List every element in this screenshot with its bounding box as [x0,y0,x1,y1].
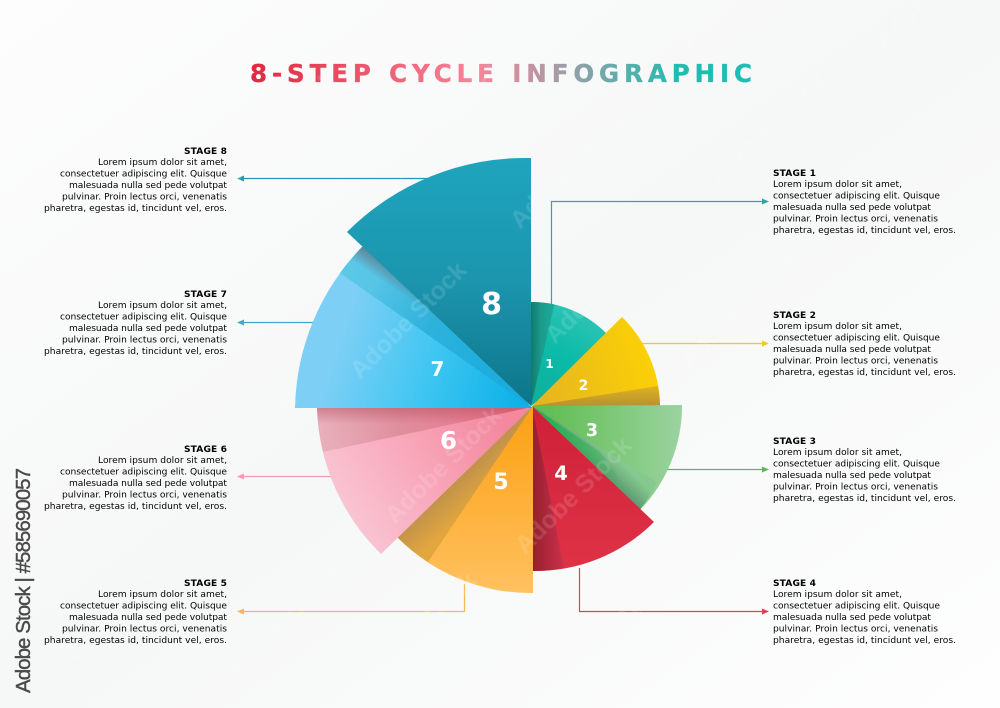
segment 6 [317,400,532,554]
watermark pattern: Adobe Stock [539,221,667,349]
text: stage 4: Lorem ipsum dolor sit amet, [773,590,902,600]
watermark pattern: Adobe Stock [379,401,507,529]
text: stage 6: STAGE 6 [184,445,227,455]
text: stage 4: STAGE 4 [773,579,816,589]
text: stage 2: STAGE 2 [773,311,816,321]
text: stage 5: pulvinar. Proin lectus orci, venenatis [62,624,227,634]
text: stage 5: malesuada nulla sed pede volutpat [69,613,227,623]
watermark pattern: Adobe Stock [384,56,512,184]
numbers: 3 [586,421,598,441]
text: stage 3: pharetra, egestas id, tincidunt vel, eros. [773,494,956,504]
text: stage 7 [44,290,227,357]
numbers: 1 [545,357,554,371]
text: stage 4: malesuada nulla sed pede volutpat [773,613,931,623]
text: stage 6: malesuada nulla sed pede volutpat [69,479,227,489]
connector: stage 1 [552,198,769,304]
segment 7 [295,240,532,408]
segment 1 [531,302,612,406]
text: stage 1 [773,169,956,236]
segment 5 [397,406,533,593]
watermark pattern: Adobe Stock [219,556,347,684]
text: stage 3: malesuada nulla sed pede volutpat [773,471,931,481]
connector: stage 5 [237,584,464,614]
text: stage 2: consectetuer adipiscing elit. Quisque [773,334,940,344]
text: stage 1: pulvinar. Proin lectus orci, venenatis [773,214,938,224]
watermark pattern: Adobe Stock [714,571,842,699]
segment 2 [532,317,660,410]
text: stage 8: malesuada nulla sed pede volutpat [69,181,227,191]
text: stage 3: pulvinar. Proin lectus orci, venenatis [773,482,938,492]
numbers: 6 [440,426,457,455]
text: stage 4: pharetra, egestas id, tincidunt vel, eros. [773,636,956,646]
watermark pattern: Adobe Stock [549,566,677,694]
watermark pattern: Adobe Stock [344,256,472,384]
text: stage 2: malesuada nulla sed pede volutpat [773,345,931,355]
text: stage 5: Lorem ipsum dolor sit amet, [98,590,227,600]
text: stage 2: pharetra, egestas id, tincidunt vel, eros. [773,368,956,378]
connector: stage 4 [580,568,769,614]
text: stage 4: consectetuer adipiscing elit. Quisque [773,602,940,612]
text: stage 6: pharetra, egestas id, tincidunt vel, eros. [44,502,227,512]
text: stage 3: STAGE 3 [773,437,816,447]
watermark pattern: Adobe Stock [714,406,842,534]
text: stage 4 [773,579,956,646]
text: stage 7: pulvinar. Proin lectus orci, venenatis [62,336,227,346]
text: stage 5: consectetuer adipiscing elit. Quisque [60,602,227,612]
connector: stage 6 [237,474,332,480]
text: stage 5 [44,579,227,646]
watermark pattern: Adobe Stock [174,386,302,514]
watermark pattern: Adobe Stock [704,66,832,194]
text: stage 1: consectetuer adipiscing elit. Quisque [773,192,940,202]
watermark pattern: Adobe Stock [864,216,992,344]
numbers: 8 [481,287,502,322]
text: stage 2: pulvinar. Proin lectus orci, venenatis [773,356,938,366]
text: stage 8: pulvinar. Proin lectus orci, venenatis [62,192,227,202]
text: stage 7: malesuada nulla sed pede volutpat [69,324,227,334]
text: stage 2: Lorem ipsum dolor sit amet, [773,322,902,332]
text: stage 5: pharetra, egestas id, tincidunt vel, eros. [44,636,227,646]
watermark pattern: Adobe Stock [874,366,1000,494]
watermark pattern: Adobe Stock [864,66,992,194]
watermark pattern: Adobe Stock [14,216,142,344]
text: stage 8: STAGE 8 [184,147,227,157]
watermark pattern: Adobe Stock [194,216,322,344]
watermark pattern: Adobe Stock [509,431,637,559]
text: stage 1: malesuada nulla sed pede volutpat [773,203,931,213]
segment 3 [532,405,682,512]
watermark pattern: Adobe Stock [674,246,802,374]
stock id side text: Adobe Stock | #585690057 [12,468,35,693]
text: stage 7: STAGE 7 [184,290,227,300]
connector: stage 2 [642,340,769,346]
text: stage 7: consectetuer adipiscing elit. Quisque [60,312,227,322]
numbers: 4 [554,462,568,485]
numbers [431,287,598,495]
watermark pattern: Adobe Stock [44,66,172,194]
numbers: 5 [493,470,509,495]
text: stage 1: Lorem ipsum dolor sit amet, [773,180,902,190]
text: stage 7: pharetra, egestas id, tincidunt vel, eros. [44,347,227,357]
text: stage 2 [773,311,956,378]
connector: stage 7 [237,320,314,326]
text: stage 7: Lorem ipsum dolor sit amet, [98,301,227,311]
watermark pattern: Adobe Stock [54,546,182,674]
text: stage 6: pulvinar. Proin lectus orci, venenatis [62,490,227,500]
watermark pattern: Adobe Stock [34,366,162,494]
text: stage 8: consectetuer adipiscing elit. Quisque [60,170,227,180]
text: stage 8: pharetra, egestas id, tincidunt vel, eros. [44,204,227,214]
text: stage 1: pharetra, egestas id, tincidunt vel, eros. [773,226,956,236]
watermark pattern: Adobe Stock [354,566,482,694]
text: stage 5: STAGE 5 [184,579,227,589]
segment 8 [347,158,531,406]
text: stage 3: consectetuer adipiscing elit. Quisque [773,460,940,470]
text: stage 6: Lorem ipsum dolor sit amet, [98,456,227,466]
watermark pattern: Adobe Stock [504,106,632,234]
text: stage 3 [773,437,956,504]
chart: spiral pie [295,158,682,593]
text: stage 6: consectetuer adipiscing elit. Quisque [60,468,227,478]
text: stage 3: Lorem ipsum dolor sit amet, [773,448,902,458]
text: stage 1: STAGE 1 [773,169,816,179]
connector: stage 8 [237,176,428,182]
text: stage 4: pulvinar. Proin lectus orci, venenatis [773,624,938,634]
title: 8-STEP CYCLE INFOGRAPHIC [250,59,752,88]
numbers: 2 [579,378,588,394]
text: stage 6 [44,445,227,512]
segment 4 [525,406,654,571]
text: stage 8: Lorem ipsum dolor sit amet, [98,158,227,168]
numbers: 7 [431,357,444,381]
text: stage 8 [44,147,227,214]
watermark pattern: Adobe Stock [214,66,342,194]
connector: stage 3 [665,466,769,472]
